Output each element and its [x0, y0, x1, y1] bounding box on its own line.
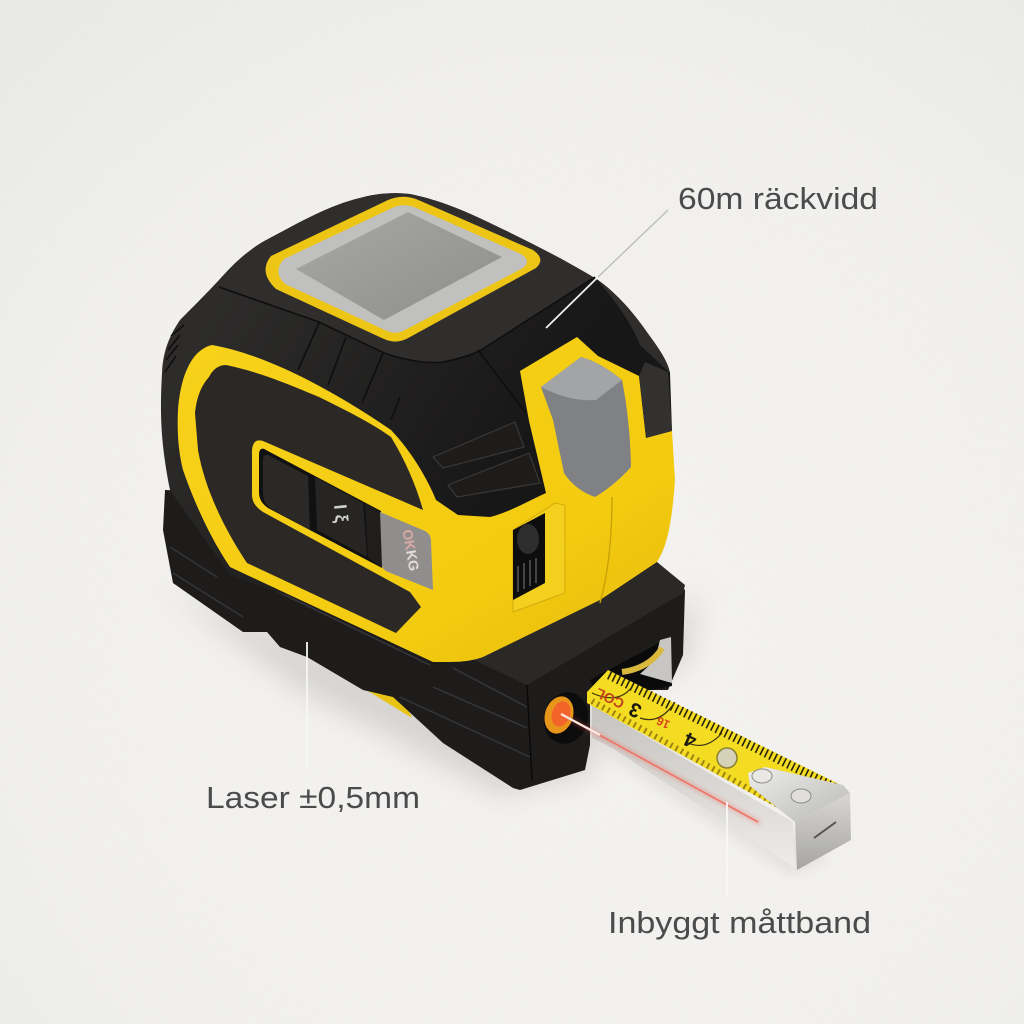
button recess — [259, 449, 382, 568]
rubber side panel — [195, 365, 423, 633]
tape slot with steel spring — [590, 637, 672, 694]
end face corner — [527, 685, 532, 780]
leader line: tape — [726, 802, 728, 895]
button two: I ξ — [329, 503, 352, 523]
ground shadow — [170, 590, 830, 875]
tape numerals: 16 — [654, 713, 672, 732]
yellow body shell — [178, 337, 675, 662]
leader line: laser — [306, 642, 308, 768]
steel end hook — [748, 767, 850, 822]
yellow lower sliver — [355, 683, 412, 718]
tape numerals — [593, 685, 700, 752]
grey logo badge: OKKG — [399, 528, 422, 572]
steel tape — [587, 670, 851, 870]
leader line: range — [598, 210, 668, 277]
LCD screen — [296, 212, 502, 320]
button three — [365, 503, 382, 568]
tape section lines — [592, 687, 722, 745]
tape side steel — [592, 705, 795, 868]
leader line: range on device — [546, 277, 598, 328]
grip pads — [433, 422, 540, 497]
hook front face — [795, 793, 851, 870]
tape measure device — [161, 193, 685, 790]
tape rivet — [717, 748, 737, 768]
right block top face — [463, 562, 685, 685]
tape lower edge markings — [592, 701, 785, 809]
laser lens window — [513, 513, 545, 600]
tape numerals: 4 — [680, 727, 700, 752]
label: range: 60m räckvidd — [678, 181, 878, 216]
laser emitter — [538, 687, 594, 749]
base highlights — [170, 547, 530, 757]
housing seam — [165, 277, 595, 420]
laser beam — [561, 714, 760, 823]
screen bezel yellow — [266, 197, 540, 342]
label: laser accuracy: Laser ±0,5mm — [206, 780, 420, 815]
tape numerals: COL — [593, 685, 627, 712]
hook rivets and slot — [752, 769, 836, 838]
buttons — [259, 449, 433, 590]
screen frame grey — [278, 205, 527, 333]
tape yellow surface — [587, 670, 843, 813]
tape numerals: 3 — [626, 697, 645, 722]
housing silhouette — [161, 193, 672, 600]
body seam — [600, 497, 612, 603]
grey slider lock — [541, 357, 631, 497]
lens recess — [513, 503, 565, 612]
black base — [163, 490, 685, 790]
button two — [315, 477, 367, 557]
top face — [219, 193, 670, 373]
tape tick marks — [609, 675, 838, 789]
right cap highlight — [639, 362, 672, 438]
grey logo badge — [380, 512, 433, 590]
button one — [263, 455, 310, 530]
label: built-in tape: Inbyggt måttband — [608, 905, 871, 940]
